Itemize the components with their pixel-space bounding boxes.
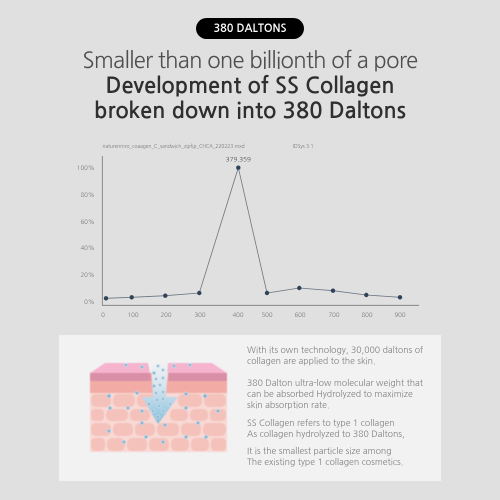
y-axis labels: 100%: [77, 165, 94, 171]
paragraph 4: The existing type 1 collagen cosmetics.: [247, 459, 403, 467]
x-axis labels: 800: [361, 312, 373, 318]
paragraph 2: [247, 379, 423, 410]
arrow: [142, 362, 178, 424]
peak value label: 379.359: [226, 156, 251, 162]
x-axis labels: 400: [232, 312, 244, 318]
paragraph 4: It is the smallest particle size among: [247, 448, 392, 456]
x-axis labels: 900: [394, 312, 406, 318]
x-axis labels: 0: [101, 312, 105, 318]
y-axis labels: 0%: [84, 299, 94, 305]
y-axis labels: 20%: [80, 272, 94, 278]
line chart: molecular weight peak: [77, 144, 419, 318]
x-axis labels: 300: [194, 312, 206, 318]
paragraph 1: [247, 346, 423, 366]
panel: skin absorption: [59, 335, 441, 481]
x-axis labels: 700: [328, 312, 340, 318]
paragraph 1: With its own technology, 30,000 daltons of: [247, 347, 423, 355]
x-axis labels: 100: [127, 312, 139, 318]
heading: broken down into 380 Daltons: broken down into 380 Daltons: [94, 100, 406, 122]
paragraph 2: skin absorption rate.: [247, 402, 330, 410]
heading: development of SS Collagen: Development of SS Collagen: [105, 75, 395, 97]
epidermis layers: [90, 363, 227, 393]
paragraph 2: 380 Dalton ultra-low molecular weight that: [247, 380, 423, 388]
y-axis labels: [77, 165, 94, 305]
paragraph 4: [247, 447, 403, 467]
y-axis labels: 60%: [80, 219, 94, 225]
chart file caption: IDSys 3.1: [293, 144, 314, 149]
y-axis labels: 40%: [80, 245, 94, 251]
skin cell layer: [90, 393, 227, 452]
x-axis labels: 200: [160, 312, 172, 318]
chart axes: [102, 156, 419, 305]
badge: 380 Daltons: [196, 18, 304, 38]
chart file caption: naturenmro_coaagen_C_sandwich_zipfip_CHCA_220223.mxd: [102, 144, 245, 149]
x-axis labels: [101, 312, 406, 318]
heading: smaller than one billionth of a pore: Smaller than one billionth of a pore: [83, 50, 417, 72]
chart file caption: [102, 144, 314, 149]
data line: [106, 168, 400, 298]
data points: [104, 166, 402, 300]
badge: 380 Daltons: 380 DALTONS: [213, 23, 287, 34]
paragraph 3: As collagen hydrolyzed to 380 Daltons,: [247, 430, 405, 438]
x-axis labels: 600: [294, 312, 306, 318]
icon: skin cross-section with collagen particles: [90, 362, 228, 452]
paragraph 3: [247, 419, 405, 438]
y-axis labels: 80%: [80, 192, 94, 198]
paragraph 2: can be absorbed Hydrolyzed to maximize: [247, 391, 413, 399]
x-axis labels: 500: [261, 312, 273, 318]
collagen particles: [107, 363, 220, 444]
paragraph 1: collagen are applied to the skin.: [247, 358, 376, 366]
paragraph 3: SS Collagen refers to type 1 collagen: [247, 420, 395, 428]
